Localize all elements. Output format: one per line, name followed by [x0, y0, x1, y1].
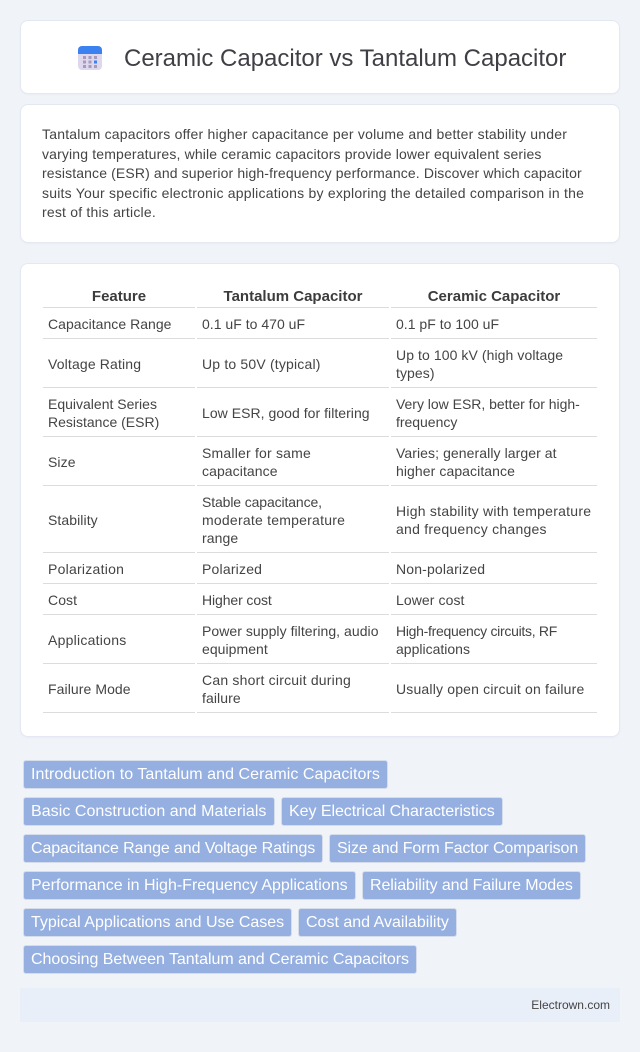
row: applications: equipment [202, 641, 268, 657]
table header row [43, 288, 597, 308]
row: capacitance range: 0.1 pF to 100 uF [396, 316, 499, 332]
row: stability: and frequency changes [396, 521, 547, 537]
row: size: Varies; generally larger at [396, 445, 557, 461]
row: capacitance range: 0.1 uF to 470 uF [202, 316, 305, 332]
row: capacitance range [43, 316, 597, 339]
row: size: higher capacitance [396, 463, 515, 479]
tag: Basic Construction and Materials [31, 803, 266, 820]
row: stability: Stability [48, 512, 98, 528]
row: failure mode: Can short circuit during [202, 672, 351, 688]
tag [362, 871, 581, 900]
row: applications: Applications [48, 632, 126, 648]
row: size: Size [48, 454, 76, 470]
tag [23, 871, 356, 900]
row: failure mode: Failure Mode [48, 681, 131, 697]
topic tags [23, 760, 586, 974]
tag [23, 760, 388, 789]
row: size [43, 445, 597, 486]
row: voltage rating [43, 347, 597, 388]
intro paragraph: rest of this article. [42, 204, 156, 220]
intro paragraph: suits Your specific electronic applications by exploring the detailed comparison in the [42, 185, 584, 201]
tag [329, 834, 586, 863]
row: ESR [43, 396, 597, 437]
row: voltage rating: Up to 50V (typical) [202, 356, 321, 372]
intro paragraph: varying temperatures, while ceramic capacitors provide lower equivalent series [42, 146, 542, 162]
tag [23, 945, 417, 974]
row: polarization: Polarization [48, 561, 124, 577]
tag [23, 797, 275, 826]
footer [20, 988, 620, 1022]
row: cost: Cost [48, 592, 77, 608]
row: ESR: Equivalent Series [48, 396, 157, 412]
comparison table panel [20, 263, 620, 737]
title: Ceramic Capacitor vs Tantalum Capacitor [124, 45, 566, 72]
row: stability [43, 494, 597, 553]
row: failure mode: Usually open circuit on failure [396, 681, 584, 697]
tag: Reliability and Failure Modes [370, 877, 573, 894]
row: ESR: Very low ESR, better for high- [396, 396, 580, 412]
row: failure mode: failure [202, 690, 241, 706]
title card [20, 20, 620, 94]
tag: Cost and Availability [306, 914, 449, 931]
intro paragraph: Tantalum capacitors offer higher capacitance per volume and better stability under [42, 126, 567, 142]
row: applications [43, 623, 597, 664]
row: cost: Higher cost [202, 592, 272, 608]
tag: Typical Applications and Use Cases [31, 914, 284, 931]
tag [298, 908, 457, 937]
row: ESR: frequency [396, 414, 457, 430]
row: capacitance range: Capacitance Range [48, 316, 171, 332]
row: stability: moderate temperature [202, 512, 345, 528]
row: polarization: Non-polarized [396, 561, 485, 577]
intro text panel [20, 104, 620, 243]
tag: Size and Form Factor Comparison [337, 840, 578, 857]
row: voltage rating: Up to 100 kV (high voltage [396, 347, 563, 363]
row: stability: High stability with temperature [396, 503, 591, 519]
row: voltage rating: Voltage Rating [48, 356, 141, 372]
row: applications: applications [396, 641, 470, 657]
intro paragraph: resistance (ESR) and superior high-frequency performance. Discover which capacitor [42, 165, 582, 181]
tag [23, 834, 323, 863]
row: polarization [43, 561, 597, 584]
tag: Capacitance Range and Voltage Ratings [31, 840, 315, 857]
icon: calendar [78, 46, 102, 70]
tag: Introduction to Tantalum and Ceramic Capacitors [31, 766, 380, 783]
tag: Key Electrical Characteristics [289, 803, 495, 820]
tag [23, 908, 292, 937]
row: applications: High-frequency circuits, RF [396, 623, 557, 639]
row: cost [43, 592, 597, 615]
table header row: Feature [92, 288, 146, 305]
row: size: Smaller for same [202, 445, 311, 461]
tag: Choosing Between Tantalum and Ceramic Capacitors [31, 951, 409, 968]
table header row: Tantalum Capacitor [224, 288, 362, 305]
tag [281, 797, 503, 826]
row: applications: Power supply filtering, audio [202, 623, 379, 639]
row: failure mode [43, 672, 597, 713]
row: voltage rating: types) [396, 365, 435, 381]
row: stability: range [202, 530, 238, 546]
row: ESR: Resistance (ESR) [48, 414, 159, 430]
row: size: capacitance [202, 463, 278, 479]
row: ESR: Low ESR, good for filtering [202, 405, 370, 421]
row: polarization: Polarized [202, 561, 262, 577]
table header row: Ceramic Capacitor [428, 288, 560, 305]
row: cost: Lower cost [396, 592, 464, 608]
footer credit: Electrown.com [531, 998, 610, 1012]
tag: Performance in High-Frequency Applications [31, 877, 348, 894]
intro paragraph [42, 126, 584, 220]
row: stability: Stable capacitance, [202, 494, 322, 510]
